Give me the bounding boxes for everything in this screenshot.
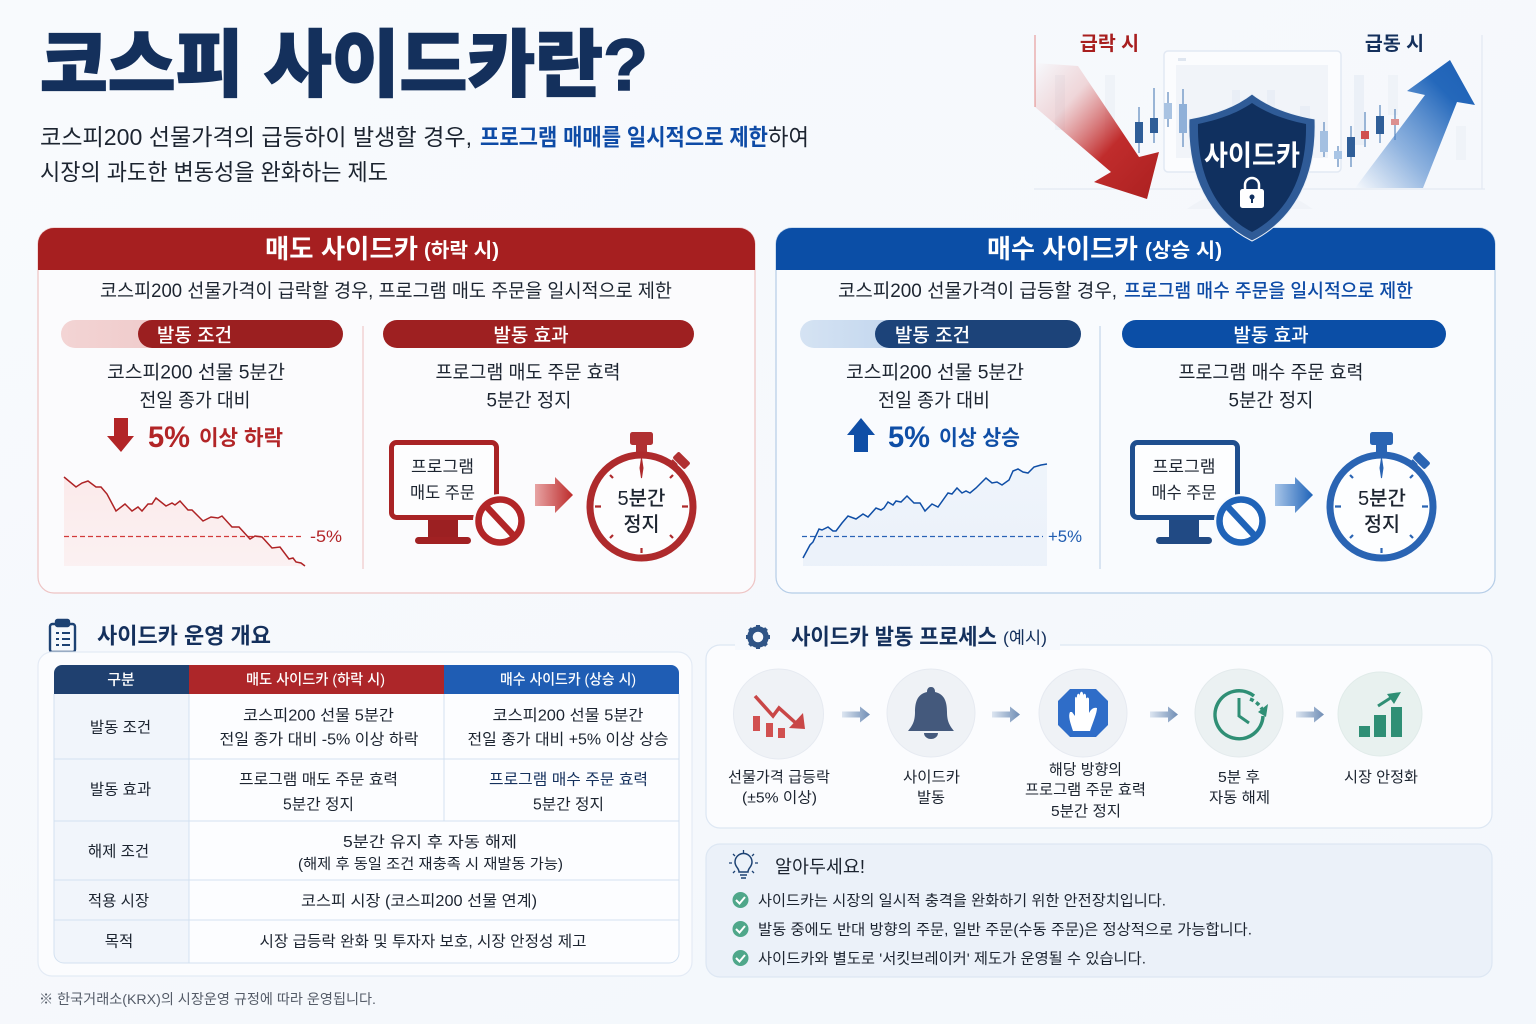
sell description: 코스피200 선물가격이 급락할 경우, 프로그램 매도 주문을 일시적으로 제한	[100, 280, 672, 302]
note 3: 사이드카와 별도로 '서킷브레이커' 제도가 운영될 수 있습니다.	[758, 950, 1146, 968]
step 1: price move: 선물가격 급등락	[728, 769, 830, 786]
icon: buy monitor with prohibition: 프로그램	[1152, 458, 1216, 476]
step 1: price move: (±5% 이상)	[742, 790, 817, 806]
buy panel header: 매수 사이드카	[987, 234, 1138, 264]
step 3: stop orders	[1025, 669, 1146, 820]
sell threshold	[148, 421, 283, 454]
row: trigger condition: 발동 조건	[90, 718, 151, 736]
panel: notes	[706, 844, 1492, 977]
row: applicable market	[88, 892, 537, 910]
buy panel header: (상승 시)	[1145, 239, 1222, 262]
sell effect text: 프로그램 매도 주문 효력	[436, 362, 620, 384]
sell effect pill: 발동 효과	[493, 324, 569, 346]
subtitle: 하여	[768, 124, 809, 150]
row: effect: 5분간 정지	[533, 796, 604, 814]
step 4: auto release: 5분 후	[1218, 769, 1260, 786]
heading: notes: 알아두세요!	[775, 857, 865, 877]
row: effect: 프로그램 매수 주문 효력	[489, 770, 648, 788]
row: release condition	[88, 833, 563, 873]
icon: clipboard	[50, 620, 75, 652]
buy up arrow	[847, 418, 875, 452]
icon: sell stopwatch	[590, 432, 693, 558]
row: effect: 프로그램 매도 주문 효력	[239, 770, 398, 788]
buy trigger pill	[800, 320, 1081, 348]
buy description: 프로그램 매수 주문을 일시적으로 제한	[1124, 280, 1413, 302]
icon: buy monitor with prohibition: 매수 주문	[1152, 484, 1216, 502]
icon: sell stopwatch: 정지	[624, 513, 660, 536]
footnote: ※ 한국거래소(KRX)의 시장운영 규정에 따라 운영됩니다.	[39, 991, 376, 1007]
step 2: trigger: 발동	[917, 790, 945, 806]
sell line chart: -5%	[310, 527, 342, 546]
buy threshold: 이상 상승	[939, 427, 1020, 450]
arrow: step 3 to 4	[1150, 706, 1178, 722]
row: purpose: 목적	[105, 932, 133, 950]
row: trigger condition: 전일 종가 대비 -5% 이상 하락	[220, 730, 418, 748]
table header row: 매수 사이드카 (상승 시)	[500, 672, 636, 688]
sell threshold: 이상 하락	[199, 427, 283, 450]
icon: lightbulb	[729, 850, 758, 878]
arrow: step 1 to 2	[842, 706, 870, 722]
icon: buy stopwatch	[1330, 432, 1433, 558]
arrow: buy effect	[1275, 477, 1313, 513]
icon: sell stopwatch: 5분간	[618, 487, 666, 510]
buy trigger text	[846, 362, 1024, 412]
arrow: step 2 to 3	[992, 706, 1020, 722]
subtitle: 시장의 과도한 변동성을 완화하는 제도	[40, 159, 388, 185]
step 2: trigger	[887, 669, 975, 806]
step 3: stop orders: 해당 방향의	[1049, 762, 1122, 778]
buy line chart: +5%	[1048, 527, 1082, 546]
panel: sell sidecar	[38, 228, 755, 593]
arrow: sell effect	[535, 477, 573, 513]
row: release condition: 5분간 유지 후 자동 해제	[343, 833, 517, 851]
table header row: 매도 사이드카 (하락 시)	[246, 672, 385, 688]
sell trigger text	[107, 362, 285, 412]
sell threshold: 5%	[148, 421, 190, 454]
buy effect text: 프로그램 매수 주문 효력	[1178, 362, 1364, 384]
icon: monitor with prohibition	[392, 442, 527, 548]
sell line chart	[64, 477, 342, 566]
row: purpose	[105, 932, 586, 950]
row: applicable market: 코스피 시장 (코스피200 선물 연계)	[301, 892, 537, 910]
subtitle: 코스피200 선물가격의 급등하이 발생할 경우,	[40, 124, 472, 150]
sell trigger pill: 발동 조건	[157, 324, 232, 346]
panel: buy sidecar	[776, 228, 1495, 593]
sell effect text: 5분간 정지	[486, 390, 572, 412]
row: trigger condition	[90, 706, 668, 748]
icon: monitor with prohibition: 프로그램	[411, 458, 474, 476]
sell trigger text: 전일 종가 대비	[140, 390, 250, 412]
panel: overview table	[38, 652, 692, 976]
row: release condition: 해제 조건	[88, 842, 149, 860]
icon: buy monitor with prohibition	[1132, 442, 1268, 548]
arrow: sharp fall	[1035, 35, 1159, 199]
arrow: sharp rise	[1355, 60, 1475, 188]
subtitle: 프로그램 매매를 일시적으로 제한	[480, 124, 768, 150]
icon: sidecar shield	[1189, 94, 1315, 241]
heading: overview: 사이드카 운영 개요	[97, 624, 271, 648]
table body background	[54, 694, 679, 963]
buy trigger text: 코스피200 선물 5분간	[846, 362, 1024, 384]
icon: sidecar shield: 사이드카	[1204, 140, 1300, 171]
sell trigger text: 코스피200 선물 5분간	[107, 362, 285, 384]
row: applicable market: 적용 시장	[88, 892, 149, 910]
icon: buy stopwatch: 5분간	[1358, 487, 1406, 510]
table header row	[54, 665, 679, 694]
table header row: 구분	[107, 672, 135, 688]
buy panel header	[776, 228, 1495, 270]
icon: gear	[746, 625, 770, 649]
buy threshold	[888, 421, 1020, 454]
sell panel header	[38, 228, 755, 270]
panel: process	[706, 624, 1492, 828]
sell trigger pill	[61, 320, 343, 348]
arrow: step 4 to 5	[1296, 706, 1324, 722]
buy effect text	[1178, 362, 1364, 412]
note 1: 사이드카는 시장의 일시적 충격을 완화하기 위한 안전장치입니다.	[758, 892, 1166, 910]
sell effect text	[436, 362, 620, 412]
row: release condition: (해제 후 동일 조건 재충족 시 재발동 가능)	[298, 856, 563, 873]
buy effect pill: 발동 효과	[1233, 324, 1309, 346]
step 1: price move	[728, 669, 830, 806]
heading: process: 사이드카 발동 프로세스	[791, 624, 997, 650]
buy description: 코스피200 선물가격이 급등할 경우,	[838, 280, 1117, 302]
buy trigger pill: 발동 조건	[895, 324, 970, 346]
illustration: market chart backdrop	[1034, 35, 1485, 209]
step 4: auto release	[1195, 669, 1283, 806]
step 5: market stabilises	[1338, 672, 1422, 786]
row: purpose: 시장 급등락 완화 및 투자자 보호, 시장 안정성 제고	[260, 932, 586, 950]
sell panel header: 매도 사이드카	[265, 234, 418, 264]
buy effect pill	[1122, 320, 1446, 348]
buy effect text: 5분간 정지	[1228, 390, 1314, 412]
buy description	[838, 280, 1413, 302]
heading: process: (예시)	[1003, 628, 1047, 648]
step 3: stop orders: 5분간 정지	[1051, 803, 1121, 820]
title: 코스피 사이드카란?	[40, 25, 648, 106]
buy threshold: 5%	[888, 421, 930, 454]
buy line chart	[802, 464, 1082, 566]
step 2: trigger: 사이드카	[903, 769, 960, 786]
buy trigger text: 전일 종가 대비	[878, 390, 990, 412]
label: sharp rise: 급동 시	[1365, 33, 1424, 55]
icon: monitor with prohibition: 매도 주문	[410, 484, 475, 502]
row: trigger condition: 전일 종가 대비 +5% 이상 상승	[468, 730, 668, 748]
label: sharp fall: 급락 시	[1080, 33, 1139, 55]
row: effect: 발동 효과	[90, 780, 151, 798]
sell effect pill	[383, 320, 694, 348]
row: trigger condition: 코스피200 선물 5분간	[243, 706, 394, 724]
row: trigger condition: 코스피200 선물 5분간	[492, 706, 644, 724]
sell down arrow	[107, 418, 134, 452]
step 3: stop orders: 프로그램 주문 효력	[1025, 782, 1146, 798]
step 5: market stabilises: 시장 안정화	[1344, 769, 1418, 786]
subtitle	[40, 124, 809, 185]
note 2: 발동 중에도 반대 방향의 주문, 일반 주문(수동 주문)은 정상적으로 가능합니다.	[758, 922, 1252, 938]
sell panel header: (하락 시)	[424, 239, 499, 262]
icon: buy stopwatch: 정지	[1364, 513, 1400, 536]
step 4: auto release: 자동 해제	[1209, 790, 1270, 806]
row: effect	[90, 770, 648, 814]
row: effect: 5분간 정지	[283, 796, 354, 814]
